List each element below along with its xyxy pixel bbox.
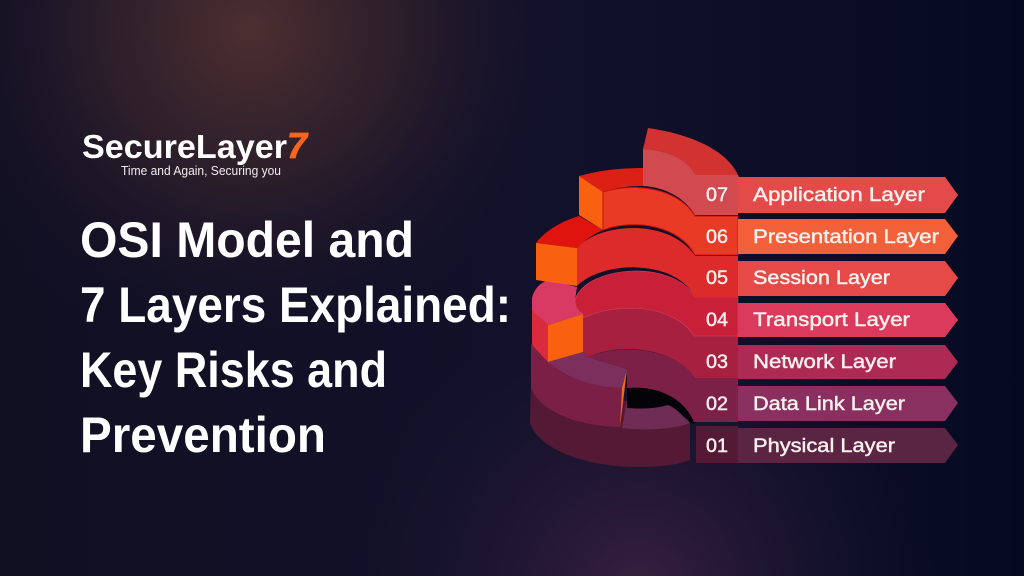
layer 07 wall and number block bbox=[643, 149, 738, 215]
title: 7 Layers Explained: bbox=[80, 277, 511, 333]
label: 01 Physical Layer bbox=[706, 428, 958, 463]
label: 02 Data Link Layer bbox=[706, 386, 958, 421]
layered ring diagram bbox=[530, 128, 739, 467]
label: 06 Presentation Layer: 06 bbox=[706, 227, 728, 248]
label: 03 Network Layer: Network Layer bbox=[753, 352, 897, 373]
layer 01 outer wall bbox=[530, 385, 690, 467]
label: 03 Network Layer: 03 bbox=[706, 352, 728, 373]
title: Key Risks and bbox=[80, 342, 387, 398]
layer 01 number block bbox=[696, 426, 738, 463]
label: 03 Network Layer bbox=[706, 345, 958, 379]
label: 07 Application Layer: Application Layer bbox=[753, 185, 926, 206]
layer 06 orange cut bbox=[579, 176, 603, 230]
label: 01 Physical Layer: 01 bbox=[706, 436, 728, 457]
layer 04 left wall bbox=[532, 308, 548, 362]
label: 05 Session Layer bbox=[706, 261, 958, 296]
label: 04 Transport Layer: Transport Layer bbox=[753, 310, 911, 331]
title: OSI Model and bbox=[80, 212, 414, 268]
label: 02 Data Link Layer: 02 bbox=[706, 394, 728, 415]
logo: SecureLayer7: 7 bbox=[287, 125, 309, 166]
label: 05 Session Layer: Session Layer bbox=[753, 268, 891, 289]
layer 02 outer wall bbox=[531, 344, 622, 427]
layer 06 top surface bbox=[579, 168, 643, 192]
label: 05 Session Layer: 05 bbox=[706, 268, 728, 289]
layer 05 wall and number block bbox=[575, 228, 738, 297]
label: 07 Application Layer: 07 bbox=[706, 185, 728, 206]
layer 05 orange cut bbox=[536, 243, 577, 286]
title: Prevention bbox=[80, 407, 326, 463]
label: 06 Presentation Layer bbox=[706, 219, 958, 254]
layer 04 orange cut bbox=[548, 314, 583, 362]
layer 03 wall and number block bbox=[583, 308, 738, 378]
label: 02 Data Link Layer: Data Link Layer bbox=[753, 394, 906, 415]
title bbox=[80, 212, 511, 463]
label: 04 Transport Layer: 04 bbox=[706, 310, 728, 331]
logo: SecureLayer7: SecureLayer bbox=[82, 128, 287, 165]
label: 04 Transport Layer bbox=[706, 303, 958, 337]
layer 07 top surface bbox=[643, 128, 739, 177]
layer 04 pink top bbox=[532, 280, 583, 325]
layer 02 top ring bbox=[548, 352, 627, 388]
logo: SecureLayer7: Time and Again, Securing you bbox=[121, 164, 281, 178]
layer 02 inner wall and number block bbox=[588, 350, 738, 422]
label: 07 Application Layer bbox=[706, 177, 958, 213]
layer 05 top surface bbox=[536, 216, 603, 248]
layer 01 top surface bbox=[622, 400, 690, 429]
logo: SecureLayer7 bbox=[82, 125, 309, 178]
black opening bbox=[627, 388, 695, 424]
layer 06 wall and number block bbox=[603, 187, 738, 255]
label: 01 Physical Layer: Physical Layer bbox=[753, 436, 896, 457]
label: 06 Presentation Layer: Presentation Layer bbox=[753, 227, 940, 248]
orange cut on layer 02 bbox=[620, 369, 627, 427]
layer 04 wall and number block bbox=[575, 271, 738, 336]
